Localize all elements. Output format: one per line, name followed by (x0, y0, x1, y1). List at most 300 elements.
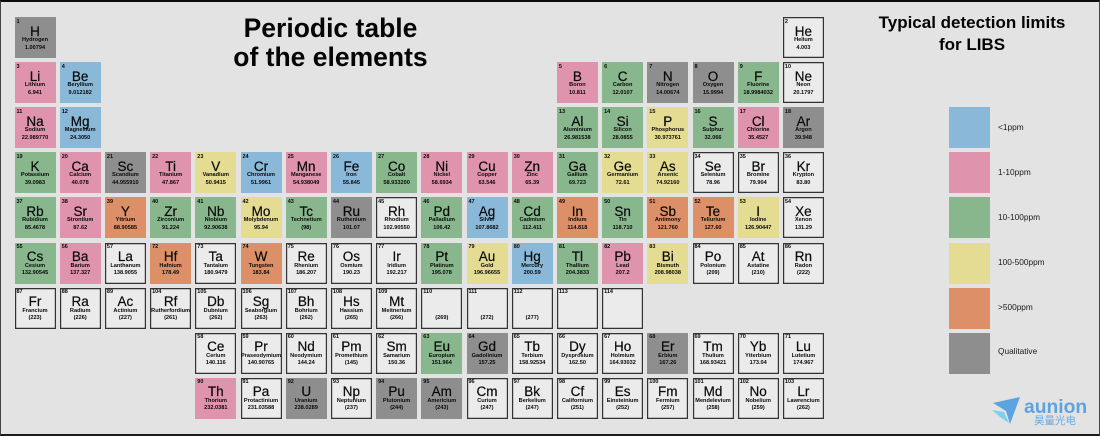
element: Th: Th (208, 384, 224, 399)
element: Nd: Nd (298, 339, 315, 354)
element: Gd: Gd (478, 339, 496, 354)
element: Bk: Berkelium (519, 398, 546, 404)
element: Br: Br (751, 159, 765, 174)
element: Xe: 54 (785, 199, 791, 205)
element: Y: 39 (107, 199, 113, 205)
element: Hs: 108 (333, 289, 342, 295)
element: Ca: Calcium (69, 172, 91, 178)
element: Kr: Krypton (793, 172, 814, 178)
element: Pa: 231.03588 (248, 405, 274, 411)
element: Tl: 204.3833 (566, 270, 589, 276)
element: Pr: 59 (242, 334, 249, 340)
element: Rh: 102.90550 (383, 225, 410, 231)
element: Bi: 208.98038 (655, 270, 681, 276)
element: Tb (512, 333, 553, 374)
element: As: 33 (649, 154, 655, 160)
legend label: 1-10 ppm: 1-10ppm (998, 167, 1031, 177)
element: Mg: Magnesium (65, 127, 96, 133)
element: Po: Po (705, 249, 721, 264)
legend heading (878, 13, 1065, 54)
element: F: 9 (740, 64, 743, 70)
element: Sb (647, 197, 688, 238)
element: Md: Mendelevium (695, 398, 731, 404)
element: Au: Gold (481, 262, 493, 268)
element: Fm: Fermium (656, 398, 680, 404)
element: Sb: 121.760 (658, 225, 678, 231)
element: La: 57 (107, 244, 113, 250)
element: C: C (618, 69, 627, 84)
element: Pa: Protactinium (244, 398, 278, 404)
element: Xe (783, 197, 824, 238)
element: Ca: 40.078 (72, 180, 89, 186)
element: Cf: Cf (571, 384, 584, 399)
element: S (692, 107, 734, 148)
element: Ru (331, 197, 372, 238)
element: Mt: (266) (390, 315, 403, 321)
element: Mt: Meitnerium (382, 308, 412, 314)
element: Cl: Chlorine (747, 127, 770, 133)
element: Ir (376, 242, 417, 284)
legend label: 100-500 ppm: 100-500ppm (998, 257, 1045, 267)
element: Tm: 168.93421 (700, 360, 726, 366)
element: O: Oxygen (703, 82, 723, 88)
element: Md (692, 378, 734, 419)
element: Bi: 83 (649, 244, 655, 250)
element: In: In (572, 204, 583, 219)
element: Tc: Technetium (291, 217, 322, 223)
element: Bh (286, 288, 327, 329)
element: Na: 22.989770 (22, 135, 48, 141)
element: Ni (421, 152, 462, 193)
element: N: N (663, 69, 673, 84)
element: Sr: 87.62 (73, 225, 87, 231)
element: Na: 11 (16, 109, 22, 115)
element: Bh: Bohrium (295, 308, 318, 314)
element: Sg (240, 288, 282, 329)
element: Eu: 151.964 (432, 360, 452, 366)
element: Sn: Sn (614, 204, 631, 219)
element: N: 7 (649, 64, 652, 70)
logo chinese name: 昊量光电 (1034, 414, 1076, 427)
element: Tm: Thulium (702, 353, 724, 359)
element: Pm: 61 (333, 334, 339, 340)
element: Sb: Sb (660, 204, 676, 219)
element: Sn: Tin (618, 217, 627, 223)
element: Mn: 25 (288, 154, 294, 160)
element: Db: Db (207, 294, 224, 309)
element: Ne: Neon (796, 82, 810, 88)
element: Bk: (247) (526, 405, 539, 411)
element: Fe: 26 (333, 154, 339, 160)
element: Cr: Cr (254, 159, 268, 174)
element: Ra: 88 (62, 289, 68, 295)
legend heading: Typical detection limits (879, 13, 1065, 32)
element: Md: Md (704, 384, 722, 399)
element: Ag: Silver (479, 217, 495, 223)
element: Er: 167.26 (659, 360, 676, 366)
element: Pb: Lead (616, 262, 629, 268)
element: Fr (14, 288, 56, 329)
element: No: No (750, 384, 767, 399)
element: Ge: Germanium (607, 172, 638, 178)
title: Periodic table (244, 13, 417, 43)
element: U (286, 378, 327, 419)
element: Md: (258) (706, 405, 720, 411)
element: W: 74 (242, 244, 249, 250)
element: Kr: 83.80 (796, 180, 810, 186)
legend heading: for LIBS (939, 35, 1005, 54)
element: Fm: Fm (658, 384, 678, 399)
element: Xe: Xe (795, 204, 812, 219)
element: Lu: 71 (785, 334, 791, 340)
element: Ar: 18 (785, 109, 791, 115)
element: Hs: (265) (345, 315, 358, 321)
logo wordmark: aunion (1024, 397, 1087, 418)
element: Gd: 64 (468, 334, 475, 340)
element: Ru: Ru (343, 204, 360, 219)
element: Zn: Zinc (526, 172, 538, 178)
element: Ne (783, 62, 824, 103)
element: Rh: 45 (378, 199, 384, 205)
element: Rn (783, 242, 824, 284)
element: Rf: Rf (164, 294, 177, 309)
element: 110 (421, 288, 462, 329)
element: No: Nobelium (745, 398, 771, 404)
element: Be: Be (72, 69, 88, 84)
element: Am: Americium (427, 398, 456, 404)
element: Dy: Dysprosium (561, 353, 594, 359)
element: Si: Silicon (613, 127, 632, 133)
element: Os: Osmium (340, 262, 363, 268)
element: Ac: (227) (119, 315, 132, 321)
element: Cu: Cu (478, 159, 496, 174)
element: Cd (512, 197, 553, 238)
element: Rf (150, 288, 191, 329)
element: Br: Bromine (747, 172, 770, 178)
element: Tb: 158.92534 (519, 360, 545, 366)
element: Re: Rhenium (294, 262, 318, 268)
element: Mo: Molybdenum (244, 217, 278, 223)
element: Be (60, 62, 101, 103)
element: Hf (150, 242, 191, 284)
element: Lu (783, 333, 824, 374)
element: Au: Au (479, 249, 495, 264)
element: Eu (421, 333, 462, 374)
element: W (240, 242, 282, 284)
element: Nb: Niobium (205, 217, 227, 223)
element: Cs: Cs (27, 249, 43, 264)
element: 111: (272) (480, 315, 494, 321)
element: Sg: Sg (253, 294, 269, 309)
element: Os: 190.23 (343, 270, 360, 276)
element: Cr: 51.9961 (251, 180, 271, 186)
element: Pa: 91 (242, 379, 249, 385)
element: Sr: Strontium (67, 217, 93, 223)
element: Rh: Rh (388, 204, 405, 219)
element: Pt (421, 242, 462, 284)
element: Rf: (261) (164, 315, 177, 321)
element: B: B (573, 69, 582, 84)
element: Pa (240, 378, 282, 419)
element: Hf: Hafnium (159, 262, 182, 268)
element: Kr: 36 (785, 154, 791, 160)
element: Ti: 47.867 (162, 180, 179, 186)
element: Sm: Sm (386, 339, 407, 354)
element: Cd: 112.411 (522, 225, 542, 231)
element: Mn: Mn (297, 159, 316, 174)
element: H: Hydrogen (22, 37, 48, 43)
element: Cl: 17 (740, 109, 746, 115)
legend label: qualitative: Qualitative (998, 346, 1037, 356)
element: Co: 27 (378, 154, 384, 160)
element: V: Vanadium (203, 172, 229, 178)
element: Eu: 63 (423, 334, 429, 340)
element: Sg: (263) (254, 315, 268, 321)
element: Yb: 70 (740, 334, 746, 340)
element: Np: (237) (345, 405, 358, 411)
element: 114: 114 (604, 289, 613, 295)
element: Sn: 50 (604, 199, 610, 205)
element: B: 5 (559, 64, 562, 70)
element: Db (195, 288, 236, 329)
element: Se: Se (705, 159, 721, 174)
element: Ir: 192.217 (386, 270, 407, 276)
element: K: 39.0983 (25, 180, 45, 186)
legend label: above 500 ppm: >500ppm (998, 302, 1033, 312)
element: Li: 6.941 (28, 90, 42, 96)
element: Db: 105 (197, 289, 206, 295)
element: Se (692, 152, 734, 193)
element: Ce (195, 333, 236, 374)
element: Sb: 51 (649, 199, 655, 205)
element: Np: Np (343, 384, 360, 399)
element: Ne: 10 (785, 64, 791, 70)
element: Al (557, 107, 598, 148)
element: K: 19 (16, 154, 23, 160)
element: Ba: 137.327 (70, 270, 90, 276)
element: Np (331, 378, 372, 419)
element: Rn: 86 (785, 244, 791, 250)
element: Ta: 73 (197, 244, 203, 250)
element: Ru: 44 (333, 199, 339, 205)
element: Ce: 140.116 (206, 360, 226, 366)
element: As: As (660, 159, 676, 174)
element: Te: Te (706, 204, 720, 219)
element: Ce: 58 (197, 334, 203, 340)
element: H: 1.00794 (25, 44, 45, 50)
element: B: Boron (569, 82, 586, 88)
element: Bi (647, 242, 688, 284)
element: Yb: Ytterbium (745, 353, 771, 359)
element: Fr: (223) (28, 315, 42, 321)
element: Si: 28.0855 (612, 135, 633, 141)
element: Hf: 178.49 (162, 270, 179, 276)
element: Sm: 150.36 (388, 360, 405, 366)
element: Ag: 47 (468, 199, 475, 205)
element: Bh: 107 (288, 289, 297, 295)
element: Zr: 40 (152, 199, 158, 205)
element: At: 85 (740, 244, 746, 250)
element: Tl: Thallium (566, 262, 589, 268)
element: Sn (602, 197, 643, 238)
element: Np: Neptunium (337, 398, 366, 404)
element: Sg: 106 (242, 289, 252, 295)
element: Y: 88.90585 (114, 225, 137, 231)
element: O: 15.9994 (703, 90, 723, 96)
element: Dy: Dy (569, 339, 586, 354)
element: Si: Si (617, 114, 629, 129)
element: Dy: 66 (559, 334, 565, 340)
element: Es: Einsteinium (607, 398, 638, 404)
element: Rn: (222) (797, 270, 810, 276)
element: Br: 79.904 (750, 180, 767, 186)
element: F: F (754, 69, 762, 84)
element: Pd: 106.42 (433, 225, 450, 231)
element: 110: (269) (435, 315, 448, 321)
element: Dy (557, 333, 598, 374)
element: I: I (756, 204, 760, 219)
element: Ar (783, 107, 824, 148)
element: Er: Erbium (658, 353, 677, 359)
element: W: W (255, 249, 267, 264)
element: Ge: 32 (604, 154, 610, 160)
element: No (738, 378, 779, 419)
element: Al: Aluminium (563, 127, 592, 133)
element: Hf: 72 (152, 244, 158, 250)
element: Db: Dubnium (204, 308, 228, 314)
element: Nb: 92.90638 (204, 225, 227, 231)
element: Tl (557, 242, 598, 284)
element: Cf: 98 (559, 379, 565, 385)
element: Am: Am (432, 384, 452, 399)
element: 113 (557, 288, 598, 329)
element: B (557, 62, 598, 103)
element: Te: 52 (694, 199, 701, 205)
element: Tm (692, 333, 734, 374)
element: Fr: Fr (29, 294, 41, 309)
element: P: P (663, 114, 672, 129)
element: Ir: 77 (378, 244, 384, 250)
element: Pb: 82 (604, 244, 610, 250)
element: Mt: Mt (389, 294, 404, 309)
element: Si: 14 (604, 109, 610, 115)
element: Sc: Sc (118, 159, 133, 174)
element: Mg (60, 107, 101, 148)
element: Tb: Terbium (521, 353, 543, 359)
element: Bk: Bk (524, 384, 540, 399)
element: C (602, 62, 643, 103)
element: Tc: 43 (288, 199, 294, 205)
element: I: Iodine (750, 217, 766, 223)
element: Hf: Hf (164, 249, 177, 264)
element: Na (14, 107, 56, 148)
element: Rn: Rn (795, 249, 812, 264)
element: Hs (331, 288, 372, 329)
element: Ho (602, 333, 643, 374)
element: Md: 101 (694, 379, 704, 385)
element: Ac: Actinium (113, 308, 137, 314)
element: Rb: Rubidium (22, 217, 48, 223)
element: La: Lanthanum (110, 262, 140, 268)
element: Zr: Zirconium (157, 217, 184, 223)
element: Bk: 97 (514, 379, 520, 385)
element: Yb (738, 333, 779, 374)
element: Pd (421, 197, 462, 238)
element: S: 32.066 (704, 135, 722, 141)
element: Rb: Rb (26, 204, 44, 219)
element: Ta: 180.9479 (204, 270, 227, 276)
element: F: Fluorine (747, 82, 769, 88)
element: Cu: 63.546 (478, 180, 496, 186)
element: Th: Thorium (205, 398, 227, 404)
element: Sc: 21 (107, 154, 113, 160)
element: Cr (240, 152, 282, 193)
element: Ho: Holmium (611, 353, 635, 359)
element: Po: 84 (694, 244, 701, 250)
element: Cd: 48 (514, 199, 520, 205)
element: 112: 112 (514, 289, 523, 295)
element: Ca: 20 (62, 154, 68, 160)
element: Pt: Pt (435, 249, 448, 264)
element: Hs: Hassium (340, 308, 363, 314)
element: Zn (512, 152, 553, 193)
element: Fe (331, 152, 372, 193)
element: P: Phosphorus (651, 127, 684, 133)
element: Mo: 42 (242, 199, 249, 205)
element: Mo: 95.94 (254, 225, 268, 231)
element: Cf: (251) (571, 405, 584, 411)
element: Pu: (244) (390, 405, 403, 411)
element: Y: Y (121, 204, 130, 219)
element: Cf (557, 378, 598, 419)
element: Cs: 55 (16, 244, 23, 250)
element: As: 74.92160 (656, 180, 679, 186)
element: Ga: Gallium (567, 172, 588, 178)
element: Cm: Curium (477, 398, 497, 404)
element: Mg: Mg (71, 114, 90, 129)
element: Ni: 58.6934 (432, 180, 452, 186)
element: Ba: 56 (62, 244, 68, 250)
element: Gd: Gadolinium (472, 353, 502, 359)
element: Th (195, 378, 236, 419)
element: Po: (209) (706, 270, 720, 276)
legend label: below 1 ppm: <1ppm (998, 122, 1024, 132)
legend swatch: above 500 ppm (949, 288, 990, 329)
legend (949, 107, 1045, 374)
element: Ta: Tantalum (204, 262, 228, 268)
element: La: 138.9055 (114, 270, 137, 276)
element: Ni: 28 (423, 154, 429, 160)
element: Tc: Tc (299, 204, 313, 219)
element: Sc: Scandium (112, 172, 139, 178)
element: Es (602, 378, 643, 419)
element: Rh (376, 197, 417, 238)
element: Ho: 67 (604, 334, 610, 340)
element: I (738, 197, 779, 238)
element: Pd: Palladium (429, 217, 455, 223)
element: K: Potassium (21, 172, 49, 178)
element: N: 14.00674 (656, 90, 679, 96)
element: Eu: Eu (434, 339, 450, 354)
element: Se: 78.96 (706, 180, 720, 186)
element: 113: 113 (559, 289, 568, 295)
element: Cd: Cd (524, 204, 541, 219)
element: Ga (557, 152, 598, 193)
element: O: O (708, 69, 718, 84)
element: Er (647, 333, 688, 374)
element: Ti (150, 152, 191, 193)
element: In: Indium (568, 217, 587, 223)
